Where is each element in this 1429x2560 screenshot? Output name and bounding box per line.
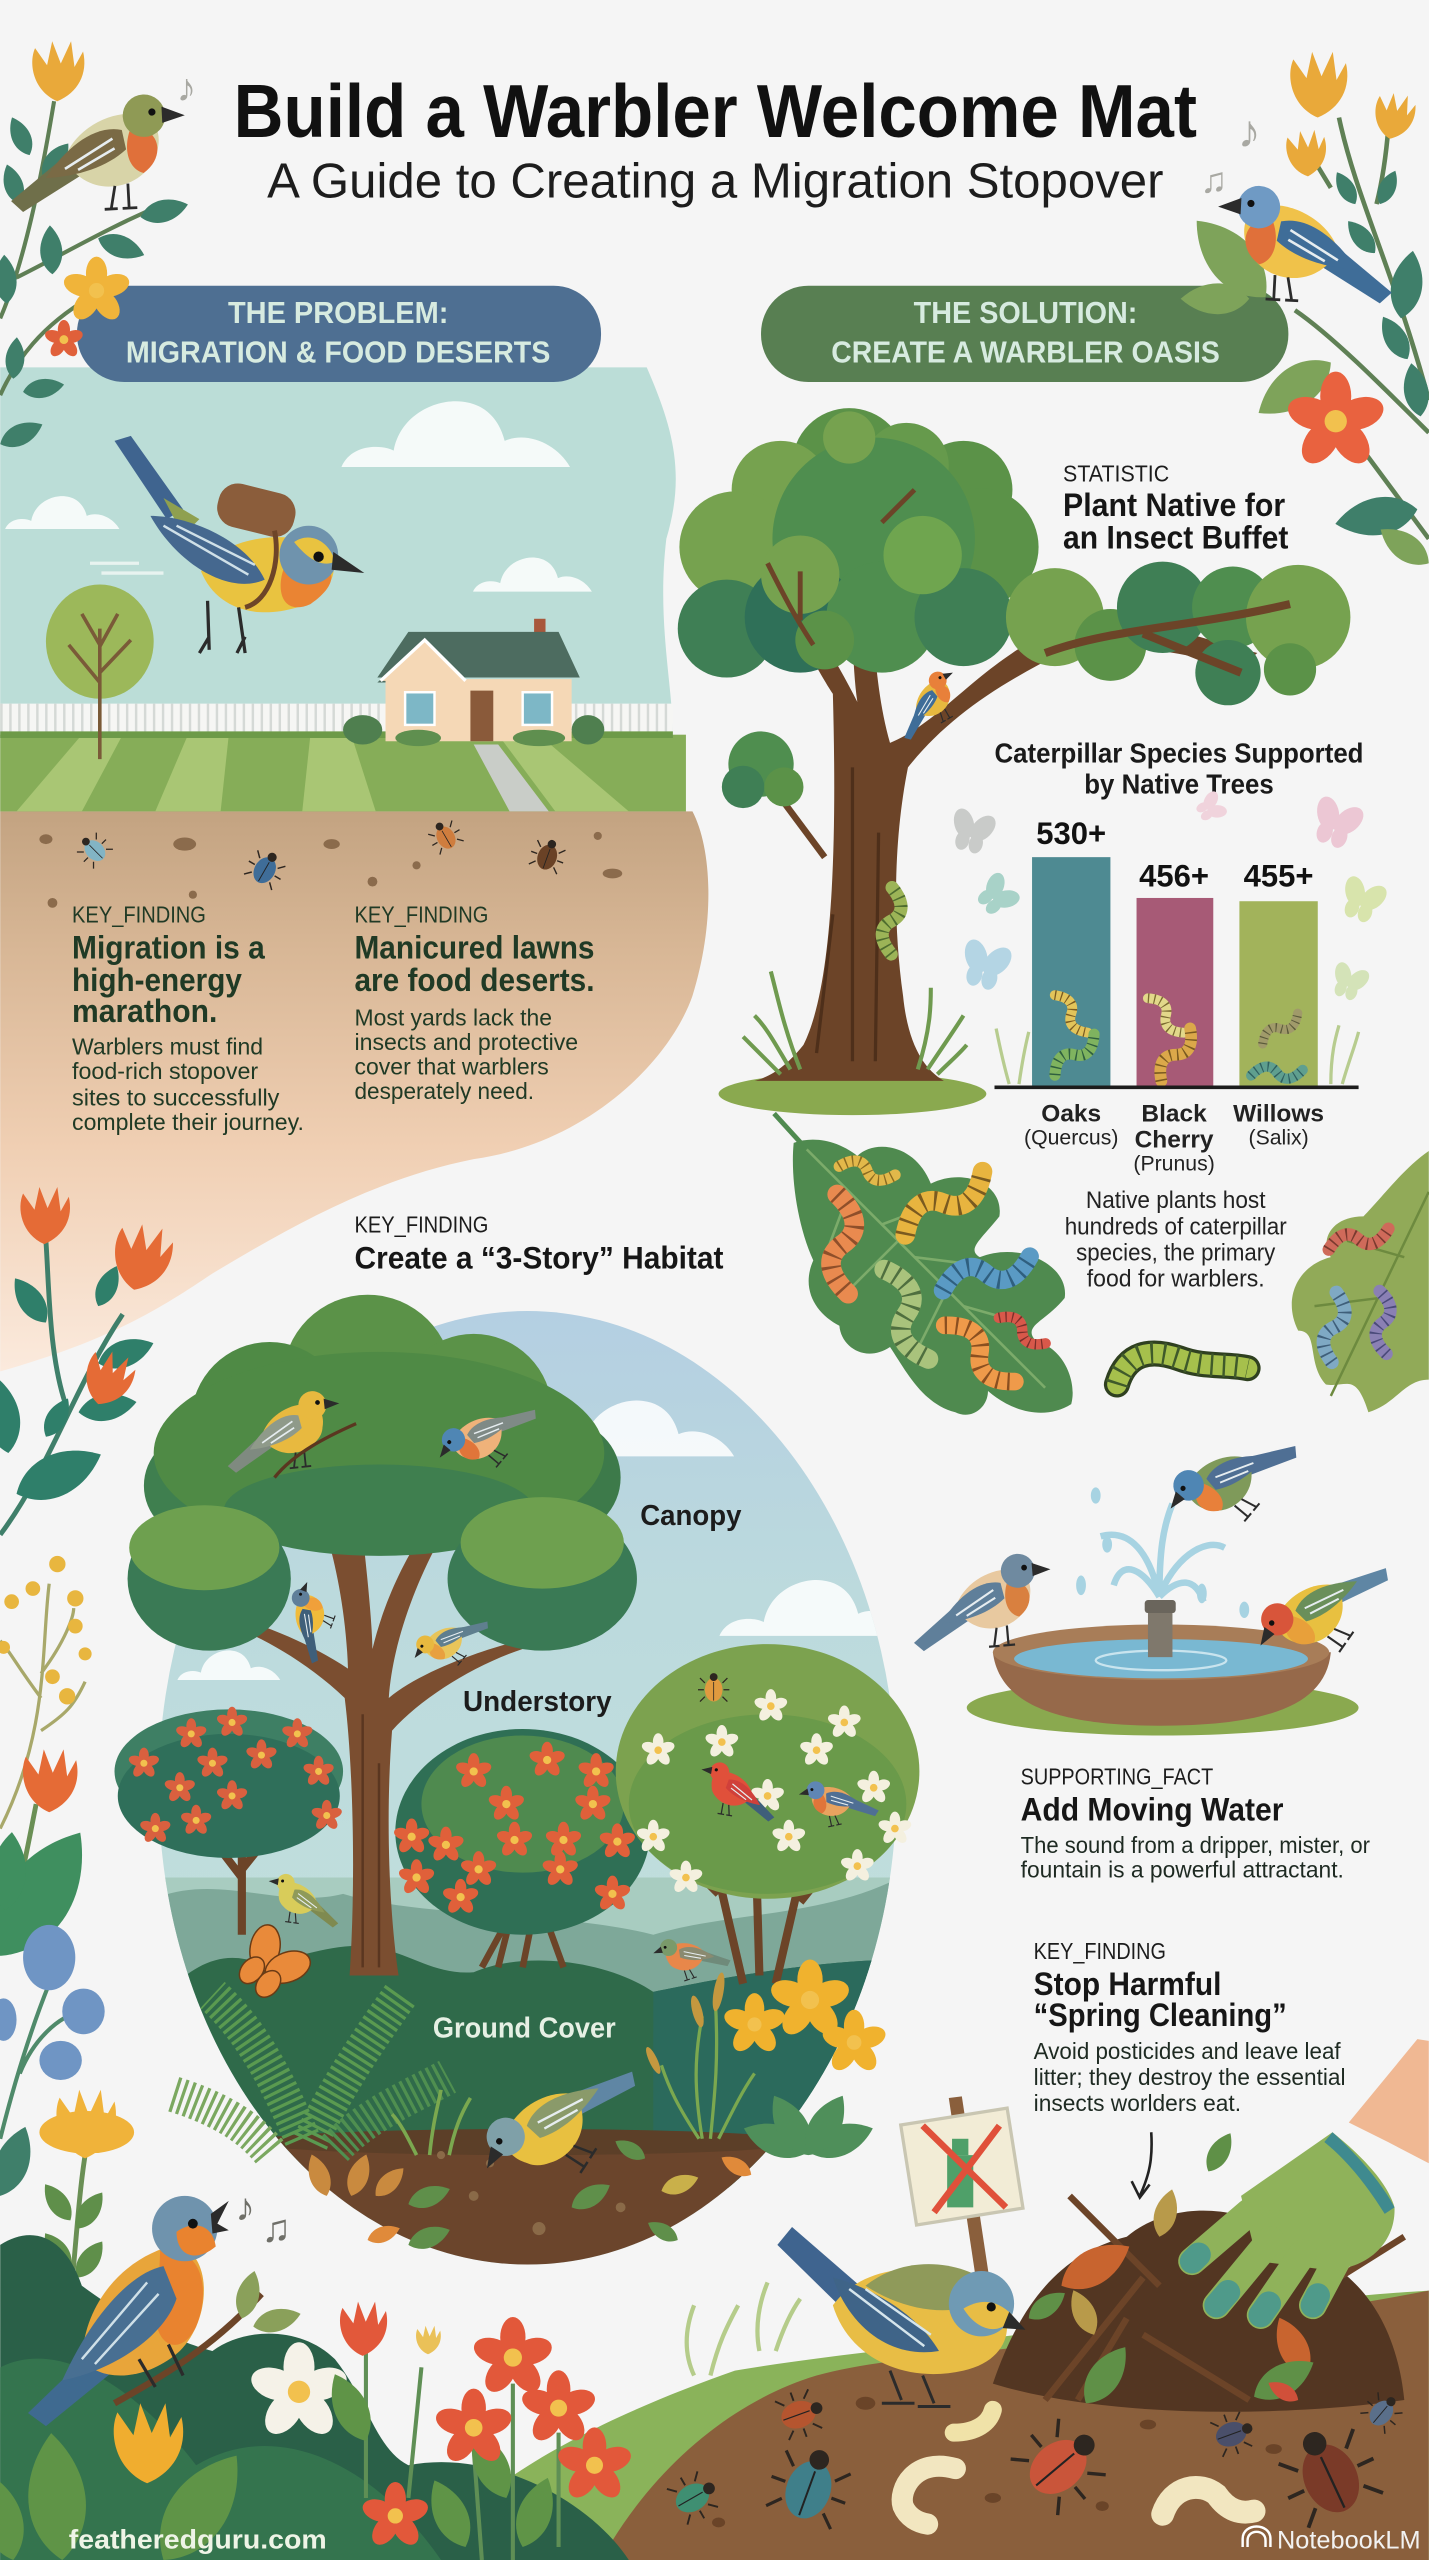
text: spring cleaning: Avoid posticides and leave leaf: [1034, 2038, 1341, 2064]
ground cover foliage: [170, 1960, 888, 2166]
subtitle: A Guide to Creating a Migration Stopover: [267, 155, 1163, 209]
soil panel: [0, 811, 708, 1371]
lawn stripes: [0, 735, 686, 811]
habitat background and ground clipped: [147, 1400, 914, 2286]
ground: [719, 1073, 986, 1115]
butterflies: [942, 786, 1395, 1005]
no-spray sign: [901, 2096, 1023, 2305]
bar: black cherry: 456+: [1139, 859, 1209, 894]
big canopy tree: [128, 1295, 637, 1976]
text: story labels: Understory: [463, 1686, 612, 1718]
clouds: [5, 401, 592, 592]
plant: orange tulip and long leaves: [0, 1749, 108, 1974]
text: migration finding: marathon.: [72, 992, 217, 1029]
text: spring cleaning: Stop Harmful: [1034, 1965, 1221, 2002]
labels: Oaks: [1041, 1101, 1101, 1128]
plant: mid left: [0, 1187, 177, 1535]
habitat sky: [159, 1311, 897, 2264]
pill: the problem: MIGRATION & FOOD DESERTS: [126, 336, 550, 369]
bar: oaks: 530+: [1036, 816, 1106, 851]
plant: top left: [0, 41, 191, 454]
illustration: 3-story habitat: [114, 1295, 919, 2286]
text: moving water: [1021, 1763, 1370, 1883]
middle shrub: [392, 1729, 650, 1967]
crown: [678, 408, 1039, 678]
plant: blue flowers: [0, 1925, 105, 2202]
left understory tree: [114, 1707, 343, 1935]
text: migration finding: KEY_FINDING: [72, 901, 206, 927]
text: native plants note: food for warblers.: [1087, 1267, 1265, 1293]
picket fence: [0, 704, 673, 738]
pill: the solution: CREATE A WARBLER OASIS: [831, 336, 1220, 369]
right branch foliage: [1006, 562, 1350, 705]
text: spring cleaning: “Spring Cleaning”: [1034, 1996, 1287, 2033]
pill: the solution: THE SOLUTION:: [914, 297, 1137, 330]
text: statistic heading: an Insect Buffet: [1063, 519, 1288, 556]
tree bird: [883, 664, 972, 743]
illustration: oak tree: [678, 408, 1350, 1115]
text: statistic heading: [1063, 461, 1288, 556]
labels: Black: [1141, 1101, 1207, 1128]
text: lawns finding: are food deserts.: [355, 961, 595, 998]
small tree: [46, 584, 154, 759]
bird with backpack: [114, 436, 364, 653]
axis: [994, 1086, 1359, 1088]
labels: (Prunus): [1133, 1153, 1215, 1176]
labels: (Quercus): [1024, 1126, 1118, 1149]
music notes: ♫: [1200, 160, 1227, 201]
soil insects and grubs: [665, 2384, 1408, 2531]
music notes near bird: [235, 2186, 291, 2251]
text: statistic heading: STATISTIC: [1063, 461, 1169, 487]
notebooklm credit: NotebookLM: [1277, 2527, 1421, 2555]
text: habitat heading: Create a “3-Story” Habitat: [355, 1241, 723, 1276]
text: migration finding: complete their journey.: [72, 1109, 304, 1135]
top-left bird: [6, 92, 189, 214]
text: migration finding: high-energy: [72, 961, 242, 998]
music notes near bird: ♫: [261, 2208, 291, 2251]
text: spring cleaning: litter; they destroy the essential: [1034, 2064, 1346, 2090]
bar: willows: 455+: [1244, 859, 1314, 894]
text: story labels: Canopy: [640, 1500, 742, 1532]
title: Build a Warbler Welcome Mat: [234, 69, 1197, 153]
grass tufts: [743, 971, 967, 1074]
music notes: ♪: [177, 67, 196, 110]
house: [343, 619, 604, 746]
text: lawns finding: desperately need.: [355, 1078, 534, 1104]
bar: oaks: [1032, 816, 1110, 1086]
bar: black cherry: [1137, 859, 1213, 1086]
top right plant: [1179, 52, 1429, 574]
bar: willows: [1239, 859, 1318, 1086]
music notes: [177, 67, 1261, 201]
bar chart: caterpillar species: [994, 816, 1359, 1176]
trunk caterpillar: [878, 887, 905, 954]
plant: yellow flower: [37, 2090, 134, 2318]
right small bird: [650, 1923, 732, 1987]
gardening arm: [1349, 2039, 1429, 2163]
sky background: [0, 367, 676, 735]
text: habitat heading: KEY_FINDING: [355, 1212, 488, 1238]
arrow: [1132, 2132, 1152, 2198]
text: moving water: The sound from a dripper, mister, or: [1021, 1832, 1370, 1858]
partial oak leaf at right: [1292, 1151, 1429, 1412]
music notes: ♪: [1238, 106, 1261, 157]
pill: the problem: THE PROBLEM:: [228, 297, 448, 330]
music notes near bird: ♪: [235, 2186, 255, 2229]
panel: problem landscape: [0, 367, 708, 1371]
text: moving water: fountain is a powerful attractant.: [1021, 1857, 1344, 1883]
insects on bare soil: [39, 815, 622, 908]
labels: [1024, 1101, 1324, 1176]
low branch foliage: [722, 731, 825, 857]
text: migration finding: Migration is a: [72, 928, 265, 965]
right flowering shrub: [616, 1644, 919, 1984]
text: native plants note: Native plants host: [1086, 1188, 1266, 1214]
fountain birds: [1158, 1400, 1303, 1550]
text: native plants note: [1065, 1188, 1287, 1293]
text: migration finding: sites to successfully: [72, 1084, 280, 1110]
bottom left garden: [0, 2235, 634, 2560]
bottom right hill: [425, 2282, 1429, 2560]
text: habitat heading: [354, 1212, 723, 1276]
red flowers: [340, 2302, 634, 2503]
oak leaf with caterpillars: [774, 1113, 1073, 1415]
text: lawns finding: insects and protective: [355, 1029, 578, 1055]
chart title: [994, 737, 1363, 799]
text: moving water: Add Moving Water: [1021, 1790, 1284, 1827]
icon: caterpillar: [1117, 1354, 1248, 1384]
labels: Cherry: [1135, 1127, 1214, 1154]
text: lawns finding: KEY_FINDING: [355, 901, 488, 927]
text: story labels: [433, 1500, 742, 2045]
text: spring cleaning: [1034, 1938, 1346, 2116]
ground bird: [470, 2023, 642, 2212]
chart title: Caterpillar Species Supported: [994, 737, 1363, 768]
text: migration finding: Warblers must find: [72, 1034, 263, 1060]
text: spring cleaning: insects worlders eat.: [1034, 2090, 1241, 2116]
leaf litter: [302, 2135, 755, 2254]
pill: the solution: [761, 286, 1288, 382]
labels: (Salix): [1249, 1126, 1309, 1149]
singing bird: [28, 2196, 229, 2426]
grass beside chart: [996, 1025, 1359, 1084]
text: story labels: Ground Cover: [433, 2013, 616, 2045]
text: lawns finding: [354, 901, 594, 1104]
flower stems: [366, 2351, 559, 2560]
illustration: fountain: [907, 1400, 1394, 1736]
text: lawns finding: Manicured lawns: [355, 928, 595, 965]
text: lawns finding: Most yards lack the: [355, 1004, 552, 1030]
leaf litter pile: [993, 2128, 1404, 2412]
foraging bird: [777, 2227, 1026, 2407]
text: moving water: SUPPORTING_FACT: [1021, 1763, 1213, 1789]
chart title: by Native Trees: [1084, 768, 1274, 799]
top-right bird: [1213, 184, 1397, 306]
text: native plants note: hundreds of caterpillar: [1065, 1214, 1287, 1240]
text: statistic heading: Plant Native for: [1063, 486, 1285, 523]
text: lawns finding: cover that warblers: [355, 1053, 549, 1079]
trunk: [754, 563, 1257, 1081]
small understory bird: [263, 1872, 344, 1929]
glove: [1192, 2132, 1395, 2315]
text: native plants note: species, the primary: [1076, 1240, 1275, 1266]
text: migration finding: [72, 901, 304, 1135]
text: spring cleaning: KEY_FINDING: [1034, 1938, 1166, 1964]
pill: the problem: [77, 286, 601, 382]
labels: Willows: [1233, 1101, 1324, 1128]
site credit: featheredguru.com: [69, 2525, 327, 2555]
left side plants: [0, 41, 191, 2318]
plant: yellow sprigs: [0, 1556, 92, 1829]
text: migration finding: food-rich stopover: [72, 1058, 259, 1084]
butterfly: [220, 1911, 324, 2014]
